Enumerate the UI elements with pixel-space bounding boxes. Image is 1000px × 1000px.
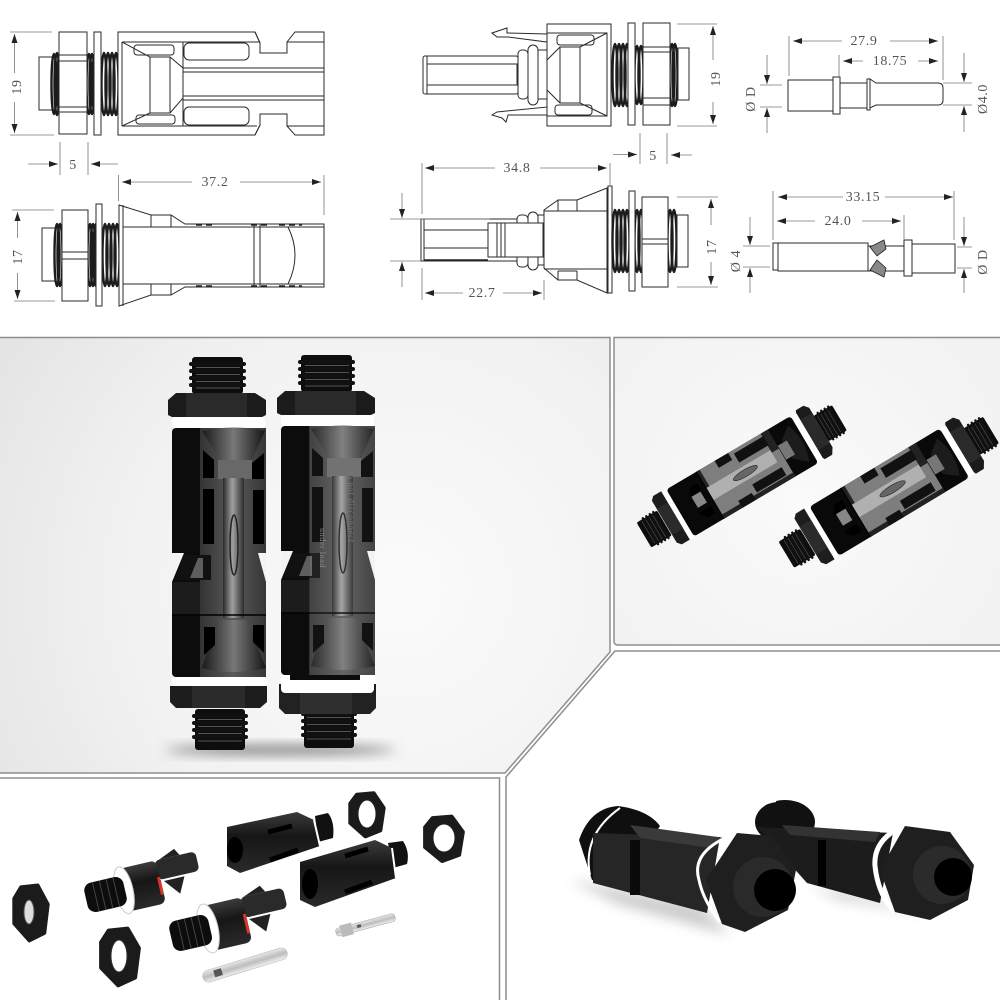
shadow [165, 746, 395, 754]
female housing: front [300, 840, 408, 907]
technical drawing: female pin [773, 240, 955, 277]
label 27.9: 27.9 [851, 34, 877, 49]
connector: front [579, 806, 796, 932]
moulded warning text: under load [318, 528, 327, 568]
connector: left [168, 357, 267, 750]
dimensions: male pin [744, 34, 991, 133]
male connector: front [164, 881, 294, 961]
label 5: 5 [69, 158, 77, 173]
label 33.15: 33.15 [846, 190, 880, 205]
dimensions: male side view [390, 193, 720, 301]
nut [59, 32, 87, 134]
label 17: 17 [11, 249, 26, 265]
label 24.0: 24.0 [825, 214, 851, 229]
label 19: 19 [709, 71, 724, 87]
panel: main connector photo background [0, 338, 610, 773]
technical drawing: male connector side view [421, 186, 688, 293]
label diameter 4.0: Ø4.0 [976, 84, 991, 114]
photo: connectors seen from the front [570, 800, 974, 935]
metal pin: large [201, 946, 289, 984]
lock nuts [14, 793, 463, 985]
metal pin: small [334, 911, 396, 939]
connector: right [770, 404, 1000, 579]
label 34.8: 34.8 [504, 161, 530, 176]
dimensions: male top view [422, 24, 724, 214]
label 19: 19 [10, 79, 25, 95]
technical drawing: male connector top view [423, 23, 689, 126]
dimensions: female side view [11, 210, 55, 301]
label OD: Ø D [744, 86, 759, 112]
panel: parts kit photo background [0, 778, 500, 1000]
moulded warning text [318, 467, 356, 568]
label 37.2: 37.2 [202, 175, 228, 190]
connector: left [629, 393, 854, 559]
tube end [39, 57, 52, 110]
dimensions: female top view [10, 32, 324, 215]
housing [118, 32, 324, 135]
label 5: 5 [649, 149, 657, 164]
technical drawing: female connector top view [39, 32, 324, 135]
technical drawing: male pin [788, 77, 943, 114]
panel: front view photo background [506, 651, 1000, 1000]
technical drawing: female connector side view [42, 204, 324, 306]
label 22.7: 22.7 [469, 286, 495, 301]
washer [94, 32, 101, 135]
label 18.75: 18.75 [873, 54, 907, 69]
male connector: rear [80, 844, 205, 922]
shadows [570, 880, 940, 935]
connector: right [277, 355, 376, 748]
moulded warning text: Do not disconnect [346, 467, 356, 543]
dimensions: female pin [729, 190, 991, 293]
female housing: rear [227, 812, 333, 873]
panel: angled connectors photo background [614, 338, 1000, 645]
connector: rear [742, 800, 974, 920]
photo: kit of connector parts [14, 793, 463, 985]
photo: pair of upright connectors [165, 355, 395, 754]
label OD: Ø D [976, 249, 991, 275]
label diameter 4: Ø 4 [729, 250, 744, 272]
threads [52, 53, 118, 115]
label 17: 17 [705, 239, 720, 255]
photo: two connectors lying diagonally [629, 393, 1000, 579]
